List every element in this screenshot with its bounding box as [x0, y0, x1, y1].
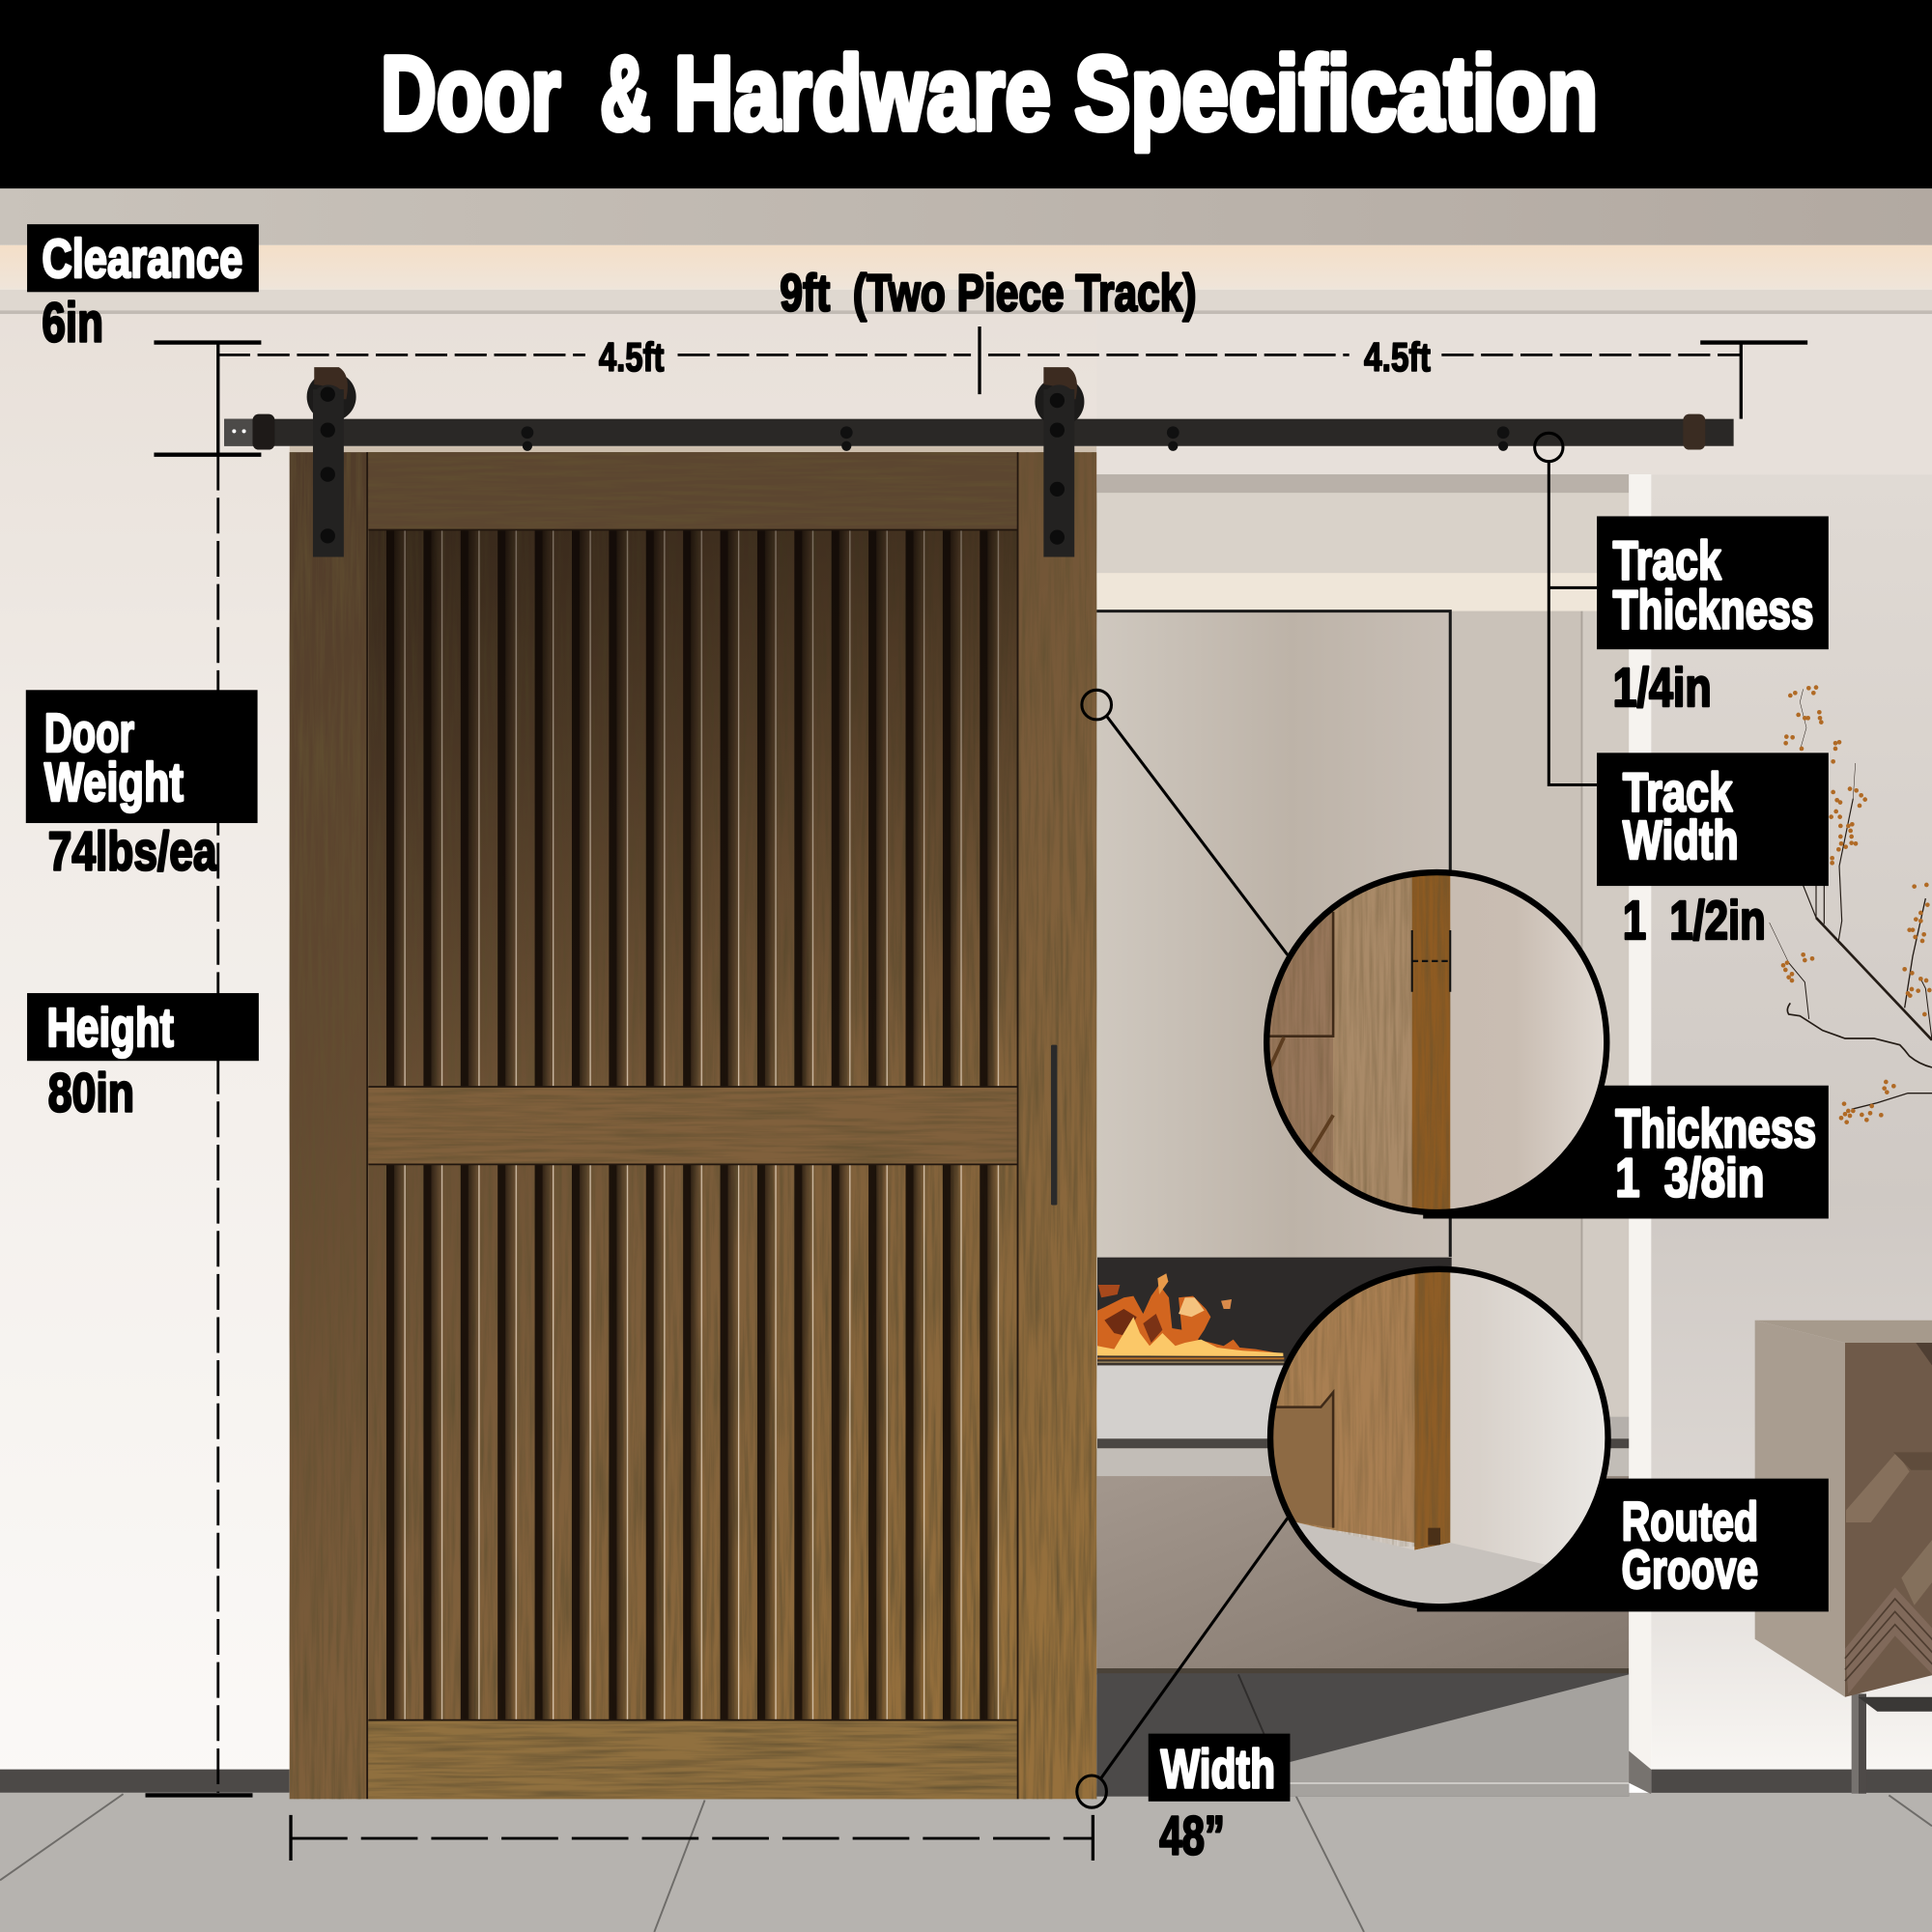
white wall post [1629, 474, 1651, 1770]
right hanger [1035, 367, 1084, 557]
label: door weight: Weight [44, 752, 184, 812]
magnifier: routed groove detail [1267, 1265, 1611, 1608]
label: track thickness: 1/4in [1613, 657, 1712, 718]
dimension lines [146, 327, 1807, 1861]
label: door thickness: 1 3/8in [1615, 1148, 1765, 1208]
header band [0, 0, 1932, 188]
label: door weight: 74lbs/ea [48, 821, 217, 882]
title: Hardware [674, 35, 1051, 152]
left hanger [307, 367, 356, 557]
label: track thickness [1597, 516, 1829, 718]
magnifier: door thickness detail [1264, 869, 1609, 1215]
label: height: 80in [48, 1063, 134, 1123]
label: routed groove [1417, 1479, 1829, 1611]
label: width: 48” [1159, 1805, 1225, 1866]
title: Door [381, 35, 560, 152]
label: height [27, 993, 259, 1123]
label: clearance [27, 224, 259, 354]
label: routed groove: Groove [1622, 1539, 1758, 1600]
title [381, 35, 1598, 152]
leader lines and detail markers [1077, 433, 1597, 1807]
label: width: Width [1161, 1739, 1275, 1800]
branch with berries [1770, 685, 1932, 1124]
doorway and interior room [1096, 474, 1651, 1797]
label: door thickness [1423, 1086, 1829, 1218]
label: clearance: Clearance [42, 228, 242, 289]
barn door track and hangers [224, 367, 1734, 557]
left track section label: 4.5ft [599, 334, 664, 380]
label: clearance: 6in [42, 292, 103, 354]
door [290, 446, 1096, 1799]
track length label: 9ft (Two Piece Track) [780, 265, 1197, 322]
door handle [1051, 1045, 1057, 1205]
label: height: Height [46, 997, 174, 1058]
label: door weight: Door [44, 702, 134, 763]
label: track thickness: Track [1613, 529, 1721, 590]
cabinet [1755, 1321, 1932, 1794]
label: door weight [26, 690, 258, 882]
label: track width: 1 1/2in [1623, 890, 1766, 951]
title: Specification [1074, 35, 1598, 152]
label: track thickness: Thickness [1613, 580, 1814, 640]
title: & [600, 35, 650, 152]
label: track width: Width [1623, 810, 1739, 870]
label: width [1149, 1734, 1290, 1866]
right track section label: 4.5ft [1364, 334, 1431, 380]
label: track width [1597, 753, 1829, 951]
label: door thickness: Thickness [1615, 1097, 1816, 1158]
fireplace [1097, 1258, 1630, 1448]
label: routed groove: Routed [1622, 1491, 1758, 1551]
label: track width: Track [1623, 761, 1733, 822]
